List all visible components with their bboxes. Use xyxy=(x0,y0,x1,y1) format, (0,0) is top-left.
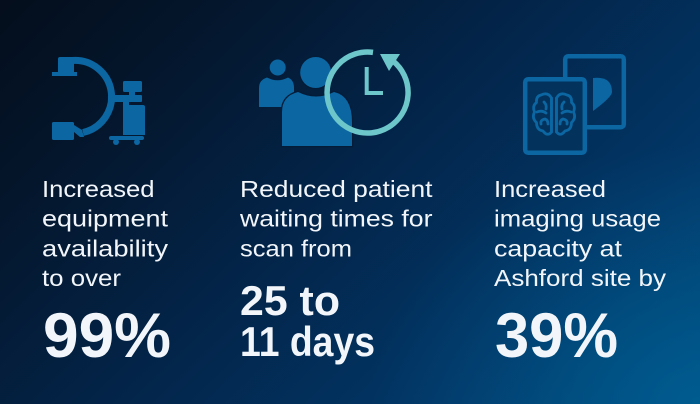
icon: small patient xyxy=(259,60,294,107)
text: imaging capacity: imaging usage xyxy=(494,206,661,232)
icon: C-arm imaging machine xyxy=(52,57,145,145)
stat: 99%: 99% xyxy=(43,301,171,371)
text: imaging capacity: Increased xyxy=(494,176,606,202)
text: equipment availability: availability xyxy=(42,235,169,261)
stat: 25 to 11 days xyxy=(240,277,375,365)
text: imaging capacity: Ashford site by xyxy=(494,265,667,291)
stat: 25 to 11 days: 11 days xyxy=(240,318,375,365)
icon: large patient xyxy=(282,57,352,146)
icon: patients with clock xyxy=(259,52,408,146)
text: equipment availability xyxy=(42,176,169,291)
icon: front scan with brain xyxy=(525,79,585,153)
stat: 25 to 11 days: 25 to xyxy=(240,277,340,324)
text: equipment availability: equipment xyxy=(42,206,169,232)
text: equipment availability: to over xyxy=(42,265,121,291)
text: waiting times: waiting times for xyxy=(239,206,433,232)
text: waiting times xyxy=(239,176,433,261)
text: imaging capacity: capacity at xyxy=(494,235,623,261)
text: waiting times: Reduced patient xyxy=(240,176,433,202)
text: waiting times: scan from xyxy=(240,235,352,261)
icon: clock with arrow xyxy=(327,52,408,133)
text: imaging capacity xyxy=(494,176,667,291)
text: equipment availability: Increased xyxy=(42,176,154,202)
icon: scans with brain and heart xyxy=(525,56,624,153)
icon: back scan with heart xyxy=(565,56,624,127)
stat: 39%: 39% xyxy=(495,301,618,371)
